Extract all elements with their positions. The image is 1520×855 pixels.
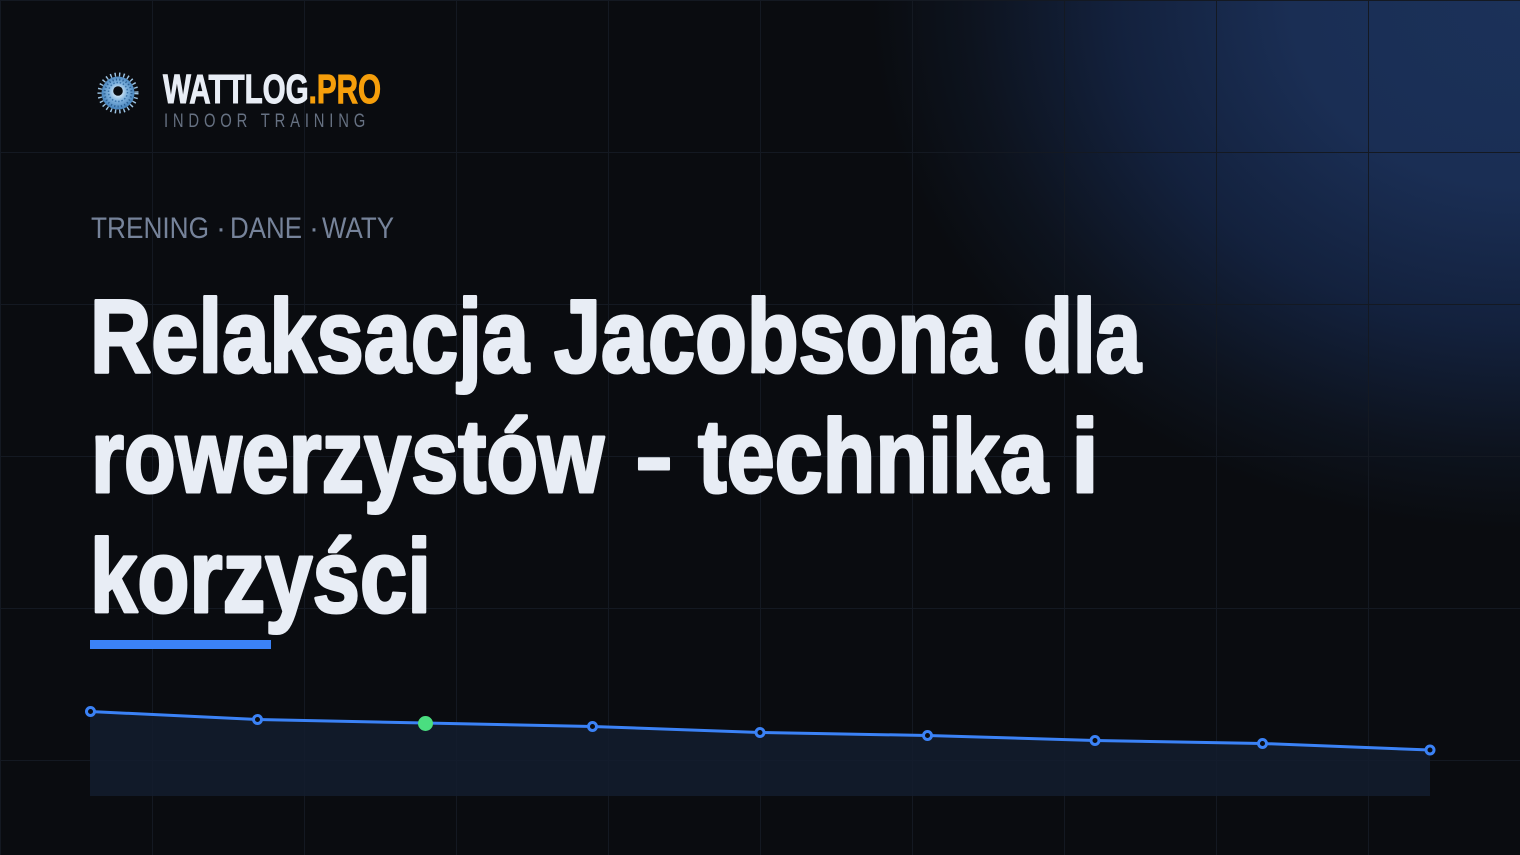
title line 2: i: [1071, 399, 1099, 515]
eyebrow: WATY: [322, 212, 394, 245]
chart line: [90, 712, 1430, 750]
title line 1: [90, 279, 1142, 395]
line chart: [86, 708, 1434, 796]
brand name: WATTLOG.PRO: [163, 66, 381, 112]
eyebrow: [91, 212, 394, 245]
highlighted point: [418, 716, 433, 731]
accent underline: [90, 640, 271, 649]
title line 1: Jacobsona: [554, 279, 997, 395]
eyebrow: ·: [309, 212, 319, 245]
title line 1: Relaksacja: [90, 279, 530, 395]
title line 2: [91, 399, 1099, 515]
eyebrow: ·: [216, 212, 226, 245]
logo: [100, 66, 381, 131]
chart area: [90, 712, 1430, 796]
title line 3: korzyści: [90, 519, 431, 635]
eyebrow: DANE: [230, 212, 302, 245]
title line 2: –: [637, 399, 671, 515]
data points: [86, 708, 1434, 754]
title: [90, 279, 1142, 635]
eyebrow: TRENING: [91, 212, 209, 245]
title line 2: technika: [698, 399, 1049, 515]
tagline: INDOOR TRAINING: [164, 110, 365, 131]
icon: cassette gear: [100, 74, 136, 112]
title line 1: dla: [1023, 279, 1142, 395]
title line 2: rowerzystów: [91, 399, 605, 515]
